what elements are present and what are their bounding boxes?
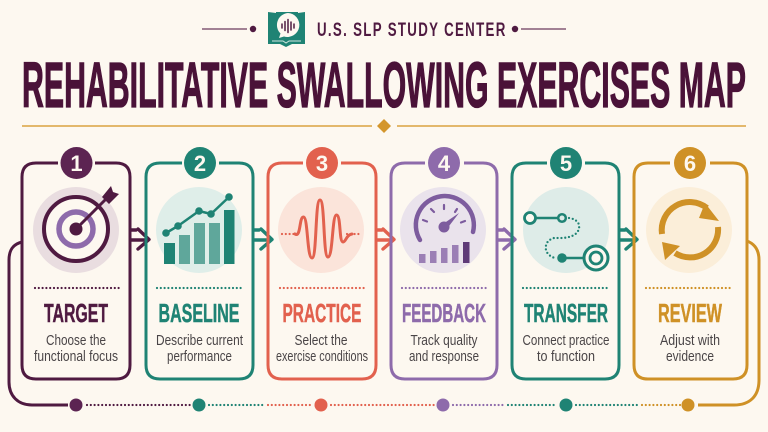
description: practice: exercise conditions xyxy=(276,349,368,365)
icon: connected path xyxy=(523,187,609,273)
heading: baseline: BASELINE xyxy=(158,298,240,328)
connector: left return line xyxy=(9,242,68,405)
icon: bar chart with trend line xyxy=(156,187,242,273)
description: feedback: Track quality xyxy=(410,333,478,349)
icon: waveform xyxy=(278,187,364,273)
step number 2: 2 xyxy=(194,151,206,176)
panel: step 5 transfer xyxy=(512,147,619,379)
step number 3 xyxy=(306,147,338,179)
heading: practice: PRACTICE xyxy=(282,298,362,328)
description: review: evidence xyxy=(666,349,714,365)
arrow: step 5 to 6 xyxy=(620,229,637,249)
description: baseline: performance xyxy=(167,349,232,365)
heading: review: REVIEW xyxy=(658,298,722,328)
description: baseline: Describe current xyxy=(156,333,243,349)
step number 4: 4 xyxy=(438,151,451,176)
step number 6 xyxy=(674,147,706,179)
brand name: U.S. SLP STUDY CENTER xyxy=(317,20,505,41)
description: transfer xyxy=(522,333,610,365)
step number 1: 1 xyxy=(70,151,83,176)
description: practice: Select the xyxy=(294,333,348,349)
description: transfer: Connect practice xyxy=(522,333,610,349)
description: transfer: to function xyxy=(537,349,595,365)
panel: step 6 review xyxy=(634,147,747,379)
connector: right return line xyxy=(698,241,759,405)
description: review xyxy=(660,333,720,365)
step number 5 xyxy=(550,147,582,179)
heading: feedback: FEEDBACK xyxy=(402,298,486,328)
description: review: Adjust with xyxy=(660,333,720,349)
icon: refresh cycle xyxy=(646,187,732,273)
description: feedback: and response xyxy=(409,349,479,365)
step number 2 xyxy=(184,147,216,179)
arrow: step 3 to 4 xyxy=(377,229,394,249)
icon: target with arrow xyxy=(33,186,119,273)
panel: step 3 practice xyxy=(268,147,376,379)
heading: target: TARGET xyxy=(44,298,108,328)
arrow: step 1 to 2 xyxy=(131,229,149,249)
step number 1 xyxy=(60,147,92,179)
icon: open book with speech bubble xyxy=(268,12,305,47)
description: practice xyxy=(276,333,368,365)
header: brand line xyxy=(202,12,566,47)
panel: step 4 feedback xyxy=(391,147,497,379)
description: feedback xyxy=(409,333,479,365)
title divider with diamond xyxy=(22,119,746,133)
step number 5: 5 xyxy=(560,151,572,176)
description: target: Choose the xyxy=(46,333,106,349)
panel: step 1 target xyxy=(22,147,130,379)
step number 3: 3 xyxy=(316,151,328,176)
arrow: step 4 to 5 xyxy=(498,229,515,249)
panel: step 2 baseline xyxy=(146,147,253,379)
timeline: dotted path with step dots xyxy=(70,398,694,412)
description: target xyxy=(34,333,118,365)
step number 6: 6 xyxy=(684,151,696,176)
description: baseline xyxy=(156,333,243,365)
description: target: functional focus xyxy=(34,349,118,365)
step number 4 xyxy=(428,147,460,179)
arrow: step 2 to 3 xyxy=(254,229,272,249)
icon: gauge with bars xyxy=(400,187,486,273)
heading: transfer: TRANSFER xyxy=(524,298,608,328)
